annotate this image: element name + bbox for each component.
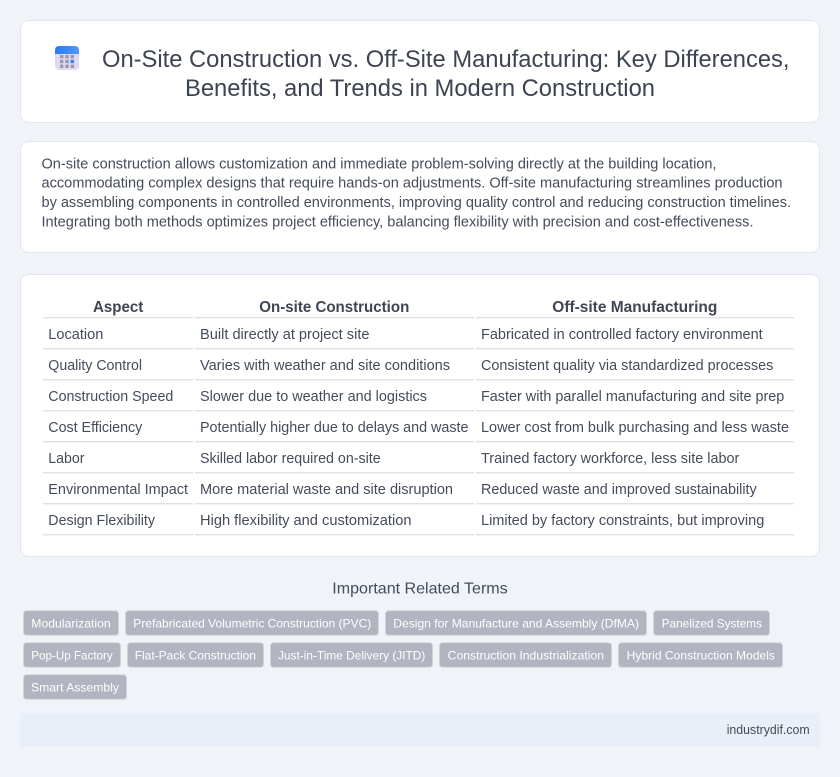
heading: important related terms: Important Related Terms (332, 580, 508, 597)
table row: design flexibility: High flexibility and customization (200, 513, 412, 529)
table header row: On-site Construction (259, 299, 409, 316)
text block: intro: Integrating both methods optimizes project efficiency, balancing flexibility with precision and cost-effectiveness. (42, 214, 754, 230)
tag: Pop-Up Factory (24, 643, 120, 667)
tag: Modularization (24, 611, 118, 635)
tag: Smart Assembly: Smart Assembly (31, 680, 119, 694)
table row: design flexibility: Limited by factory constraints, but improving (481, 513, 764, 529)
tag: JITD: Just-in-Time Delivery (JITD) (278, 648, 425, 662)
footer source text: industrydif.com (727, 722, 810, 737)
tag: PVC: Prefabricated Volumetric Construction (PVC) (133, 616, 371, 630)
tag: Panelized Systems: Panelized Systems (662, 616, 762, 630)
panel: comparison table (20, 274, 820, 556)
table row: labor: Trained factory workforce, less site labor (481, 451, 740, 467)
tag list (24, 611, 782, 699)
table header row (93, 299, 717, 316)
table row: location: Built directly at project site (200, 327, 370, 343)
title: On-Site Construction vs. Off-Site Manufacturing: Key Differences, (102, 46, 790, 73)
text block: intro (42, 156, 791, 230)
table row: design flexibility: Design Flexibility (48, 513, 156, 529)
table row: construction speed: Slower due to weather and logistics (200, 389, 427, 405)
table row: design flexibility (48, 513, 764, 529)
table row: quality control: Varies with weather and site conditions (200, 358, 450, 374)
table row: quality control: Consistent quality via standardized processes (481, 358, 773, 374)
table row: environmental impact (48, 482, 757, 498)
text block: intro: accommodating complex designs that require hands-on adjustments. Off-site manufacturing streamlines production (42, 176, 782, 192)
tag: Pop-Up Factory: Pop-Up Factory (31, 648, 113, 662)
tag: Construction Industrialization: Construction Industrialization (448, 648, 604, 662)
table header row: Aspect (93, 299, 144, 316)
tag: DfMA (386, 611, 646, 635)
table row: location: Location (48, 327, 103, 343)
tag: Hybrid Construction Models: Hybrid Construction Models (627, 648, 775, 662)
table row: environmental impact: More material waste and site disruption (200, 482, 453, 498)
tag: Flat-Pack Construction (128, 643, 264, 667)
table row: quality control: Quality Control (48, 358, 142, 374)
tag: Hybrid Construction Models (618, 643, 782, 667)
title: Benefits, and Trends in Modern Construction (185, 75, 655, 102)
table row: cost efficiency: Cost Efficiency (48, 420, 143, 436)
panel: intro paragraph (20, 142, 820, 252)
tag: JITD (270, 643, 432, 667)
table row: construction speed (48, 389, 784, 405)
tag: Panelized Systems (654, 611, 770, 635)
table row: environmental impact: Environmental Impact (48, 482, 188, 498)
table row: labor (48, 451, 740, 467)
table row: labor: Skilled labor required on-site (200, 451, 381, 467)
tag: DfMA: Design for Manufacture and Assembly (DfMA) (393, 616, 639, 630)
table row: cost efficiency: Potentially higher due to delays and waste (200, 420, 468, 436)
tag: Flat-Pack Construction: Flat-Pack Construction (135, 648, 256, 662)
icon: calendar grid (55, 46, 79, 70)
table row: quality control (48, 358, 773, 374)
text block: intro: by assembling components in controlled environments, improving quality control and reducing construction timelines. (42, 195, 791, 211)
title (102, 46, 790, 102)
tag: Construction Industrialization (440, 643, 612, 667)
footer bar (20, 713, 820, 747)
panel: header (20, 20, 820, 122)
table row: location: Fabricated in controlled factory environment (481, 327, 763, 343)
tag: Modularization: Modularization (31, 616, 111, 630)
table row: construction speed: Construction Speed (48, 389, 173, 405)
table row: cost efficiency (48, 420, 789, 436)
table row: labor: Labor (48, 451, 85, 467)
tag: PVC (126, 611, 378, 635)
table header row: Off-site Manufacturing (552, 299, 717, 316)
table row: environmental impact: Reduced waste and improved sustainability (481, 482, 757, 498)
text block: intro: On-site construction allows customization and immediate problem-solving directly at the building location, (42, 156, 717, 172)
table row: construction speed: Faster with parallel manufacturing and site prep (481, 389, 784, 405)
tag: Smart Assembly (24, 675, 126, 699)
table row: cost efficiency: Lower cost from bulk purchasing and less waste (481, 420, 789, 436)
table row: location (48, 327, 763, 343)
